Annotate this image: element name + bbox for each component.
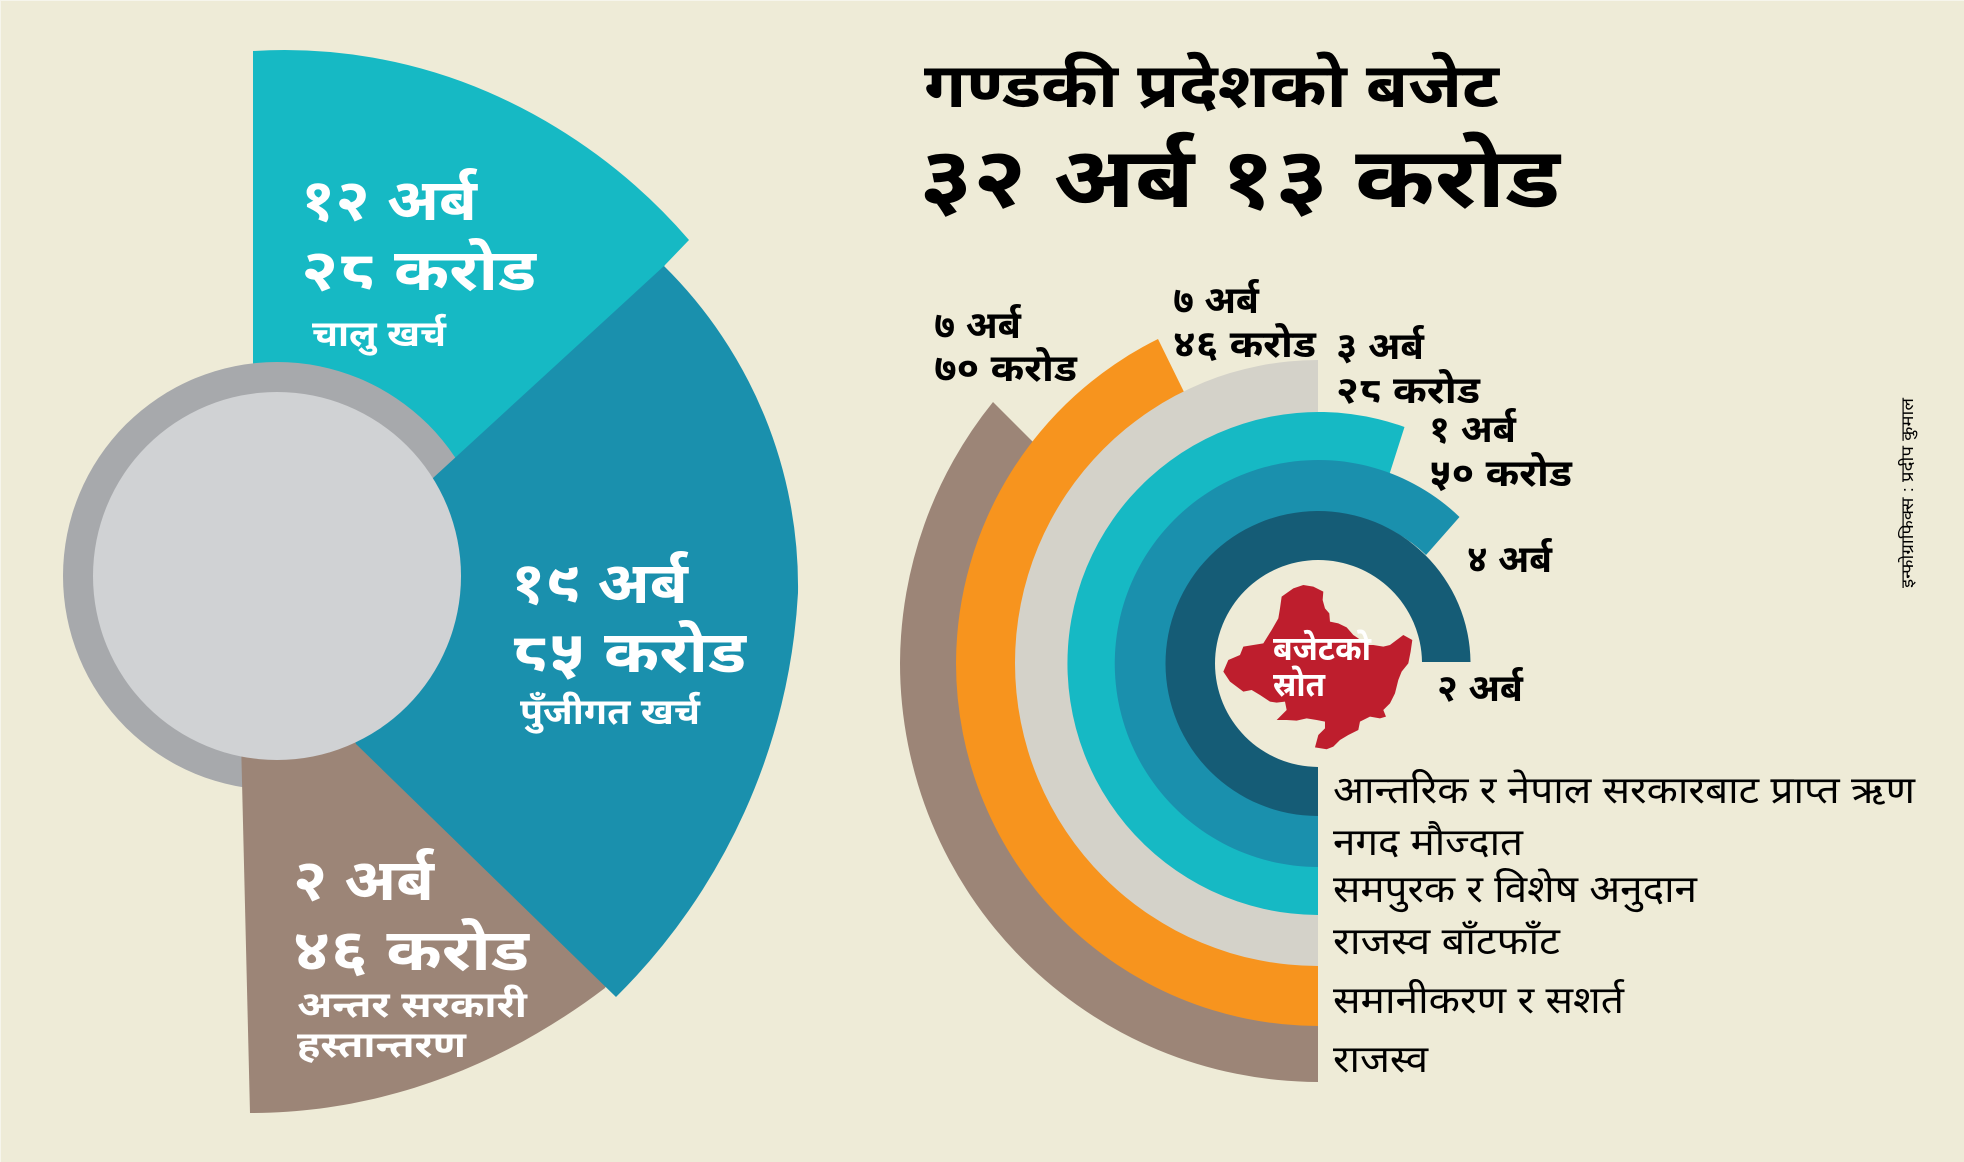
amount labels for arcs: ३ अर्ब bbox=[1336, 324, 1425, 368]
label: recurrent expenditure amount: २८ करोड bbox=[301, 238, 537, 303]
amount labels for arcs: ५० करोड bbox=[1429, 451, 1573, 495]
arc: equalization and conditional grants bbox=[956, 339, 1318, 1026]
legend labels: आन्तरिक र नेपाल सरकारबाट प्राप्त ऋण bbox=[1333, 768, 1916, 812]
label: intergovernmental transfer amount: अन्तर सरकारी bbox=[297, 984, 529, 1025]
label: capital expenditure amount: पुँजीगत खर्च bbox=[520, 690, 701, 734]
legend labels: समानीकरण र सशर्त bbox=[1333, 978, 1625, 1022]
wedge: recurrent expenditure bbox=[253, 50, 689, 600]
label: capital expenditure amount: १९ अर्ब bbox=[511, 551, 689, 616]
amount labels for arcs: २८ करोड bbox=[1336, 368, 1481, 412]
amount labels for arcs: ४६ करोड bbox=[1173, 322, 1317, 366]
legend labels: राजस्व bbox=[1333, 1039, 1429, 1081]
amount labels for arcs: ४ अर्ब bbox=[1467, 537, 1553, 581]
credit: इन्फोग्राफिक्स : प्रदीप कुमाल bbox=[1897, 397, 1919, 588]
legend labels: राजस्व बाँटफाँट bbox=[1333, 919, 1561, 963]
map: Gandaki province bbox=[1223, 585, 1412, 749]
title bbox=[919, 50, 1561, 225]
arc: complementary and special grants bbox=[1067, 412, 1404, 915]
title: गण्डकी प्रदेशको बजेट bbox=[924, 50, 1501, 121]
legend labels bbox=[1333, 768, 1916, 1081]
wedge: intergovernmental transfer bbox=[241, 740, 608, 1113]
label: capital expenditure amount: ८५ करोड bbox=[511, 620, 747, 685]
title: ३२ अर्ब १३ करोड bbox=[919, 131, 1561, 225]
amount labels for arcs: २ अर्ब bbox=[1437, 666, 1524, 710]
amount labels for arcs bbox=[934, 278, 1573, 710]
label: intergovernmental transfer amount: २ अर्ब bbox=[293, 848, 435, 913]
inner grey circle bbox=[93, 392, 461, 760]
panel: budget source concentric arcs bbox=[900, 278, 1916, 1082]
label: intergovernmental transfer amount: हस्तान्तरण bbox=[297, 1024, 467, 1065]
amount labels for arcs: ७ अर्ब bbox=[934, 303, 1022, 347]
wedge: capital expenditure bbox=[300, 266, 798, 997]
label: recurrent expenditure amount: १२ अर्ब bbox=[301, 168, 478, 233]
label: recurrent expenditure amount: चालु खर्च bbox=[312, 313, 447, 356]
label: recurrent expenditure amount bbox=[301, 168, 537, 356]
arc: revenue bbox=[900, 402, 1318, 1082]
outer grey ring bbox=[63, 362, 491, 790]
map label: स्रोत bbox=[1273, 666, 1326, 704]
amount labels for arcs: ७ अर्ब bbox=[1173, 278, 1260, 322]
label: capital expenditure amount bbox=[511, 551, 747, 734]
amount labels for arcs: १ अर्ब bbox=[1429, 407, 1517, 451]
map label: बजेटको bbox=[1273, 629, 1372, 668]
legend labels: समपुरक र विशेष अनुदान bbox=[1333, 867, 1698, 912]
panel: expenditure semicircle chart bbox=[63, 50, 798, 1113]
label: intergovernmental transfer amount: ४६ करोड bbox=[293, 918, 530, 983]
arc: internal and federal government loans bbox=[1166, 511, 1470, 816]
arc: revenue sharing bbox=[1015, 360, 1318, 966]
map label bbox=[1273, 629, 1372, 704]
legend labels: नगद मौज्दात bbox=[1333, 820, 1524, 864]
label: intergovernmental transfer amount bbox=[293, 848, 530, 1065]
amount labels for arcs: ७० करोड bbox=[934, 346, 1078, 390]
arc: cash balance bbox=[1115, 460, 1460, 867]
